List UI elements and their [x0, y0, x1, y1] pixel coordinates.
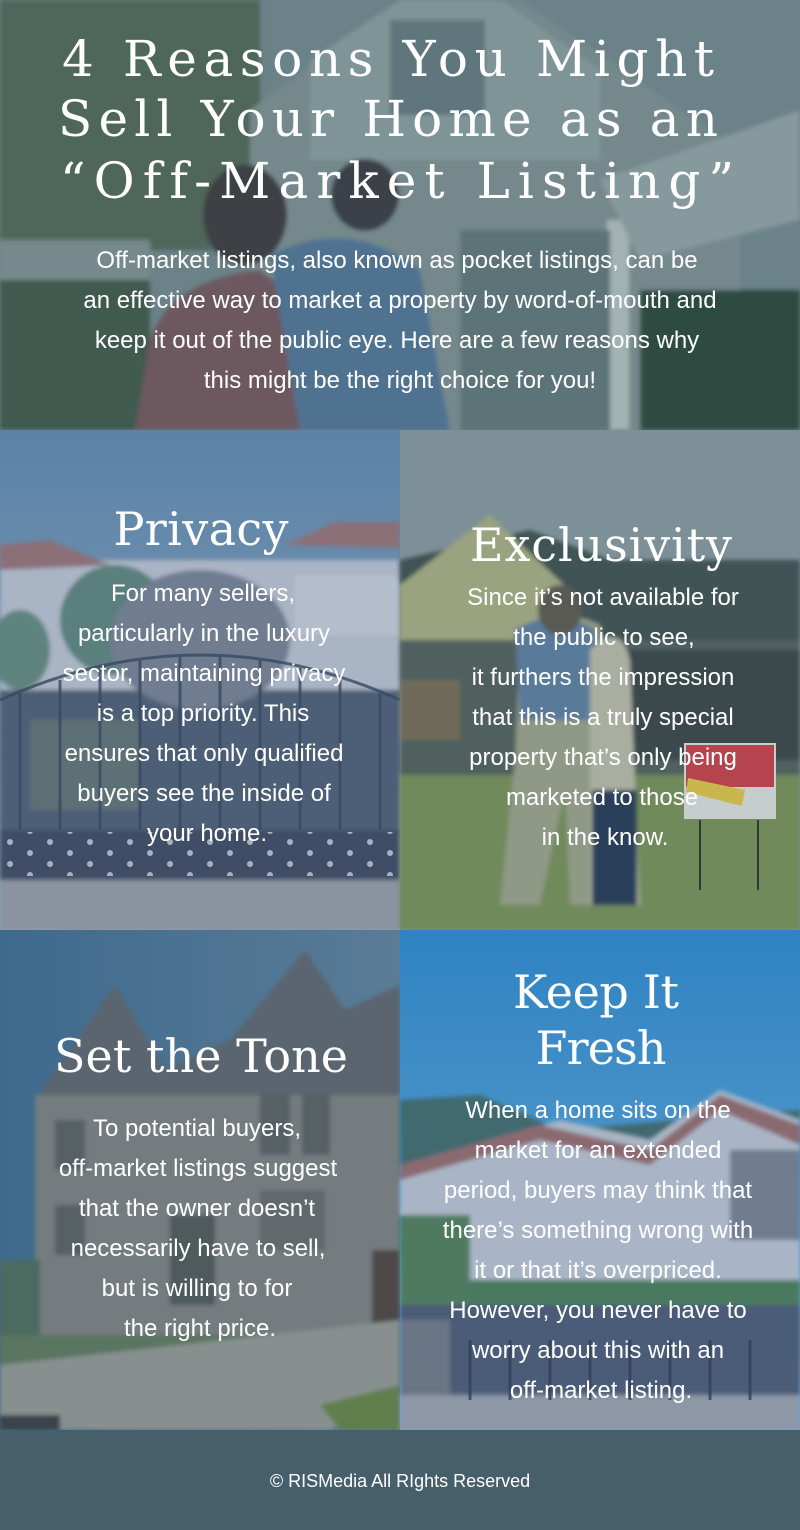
- title: Sell Your Home as an: [58, 90, 718, 148]
- footer: © RISMedia All RIghts Reserved: [270, 1471, 530, 1491]
- footer: [0, 1430, 800, 1530]
- text: tone body: To potential buyers,: [93, 1115, 301, 1142]
- text: privacy body: ensures that only qualified: [65, 740, 343, 767]
- heading: Set the Tone: Set the Tone: [54, 1029, 348, 1083]
- text: fresh body: When a home sits on the: [465, 1097, 731, 1124]
- photo: couple on lawn with sold sign: [400, 430, 800, 930]
- text: privacy body: For many sellers,: [111, 580, 295, 607]
- text: privacy body: buyers see the inside of: [77, 780, 331, 807]
- heading: Keep It Fresh: Fresh: [536, 1021, 666, 1075]
- panel: keep it fresh: [400, 930, 800, 1430]
- title: 4 Reasons You Might: [62, 30, 714, 88]
- text: privacy body: sector, maintaining privacy: [63, 660, 345, 687]
- photo: gated villa: [0, 430, 400, 930]
- text: exclusivity body: that this is a truly special: [472, 704, 734, 731]
- text: fresh body: it or that it’s overpriced.: [474, 1257, 722, 1284]
- title: [58, 30, 734, 210]
- text: exclusivity body: in the know.: [542, 824, 668, 851]
- text: tone body: that the owner doesn’t: [79, 1195, 315, 1222]
- text: fresh body: [443, 1097, 753, 1404]
- text: tone body: but is willing to for: [102, 1275, 292, 1302]
- text: fresh body: off-market listing.: [510, 1377, 692, 1404]
- panel: privacy: [0, 430, 400, 930]
- heading: Keep It Fresh: [513, 965, 680, 1075]
- text: fresh body: However, you never have to: [449, 1297, 747, 1324]
- text: privacy body: particularly in the luxury: [78, 620, 330, 647]
- text: exclusivity body: property that’s only being: [469, 744, 737, 771]
- photo: mountain house: [400, 930, 800, 1430]
- intro text: keep it out of the public eye. Here are a few reasons why: [95, 327, 699, 354]
- text: exclusivity body: it furthers the impression: [472, 664, 734, 691]
- text: fresh body: there’s something wrong with: [443, 1217, 753, 1244]
- panel: exclusivity: [400, 430, 800, 930]
- text: tone body: [59, 1115, 338, 1342]
- intro text: [83, 247, 717, 394]
- text: exclusivity body: the public to see,: [513, 624, 695, 651]
- text: privacy body: your home.: [147, 820, 267, 847]
- text: fresh body: period, buyers may think that: [444, 1177, 752, 1204]
- text: fresh body: worry about this with an: [471, 1337, 724, 1364]
- panel: set the tone: [0, 930, 400, 1430]
- intro text: Off-market listings, also known as pocket listings, can be: [96, 247, 698, 274]
- heading: Privacy: Privacy: [114, 502, 288, 556]
- photo: stone manor: [0, 930, 400, 1430]
- text: tone body: the right price.: [124, 1315, 276, 1342]
- text: tone body: off-market listings suggest: [59, 1155, 338, 1182]
- title: “Off-Market Listing”: [60, 152, 734, 210]
- heading: Exclusivity: Exclusivity: [470, 518, 732, 572]
- text: exclusivity body: marketed to those: [506, 784, 698, 811]
- text: fresh body: market for an extended: [475, 1137, 721, 1164]
- intro text: an effective way to market a property by word-of-mouth and: [83, 287, 717, 314]
- heading: Keep It Fresh: Keep It: [513, 965, 680, 1019]
- panel: header with couple and house photo: [0, 0, 800, 430]
- text: tone body: necessarily have to sell,: [71, 1235, 325, 1262]
- intro text: this might be the right choice for you!: [204, 367, 596, 394]
- text: privacy body: is a top priority. This: [97, 700, 309, 727]
- text: privacy body: [63, 580, 345, 847]
- text: exclusivity body: Since it’s not available for: [467, 584, 739, 611]
- text: exclusivity body: [467, 584, 739, 851]
